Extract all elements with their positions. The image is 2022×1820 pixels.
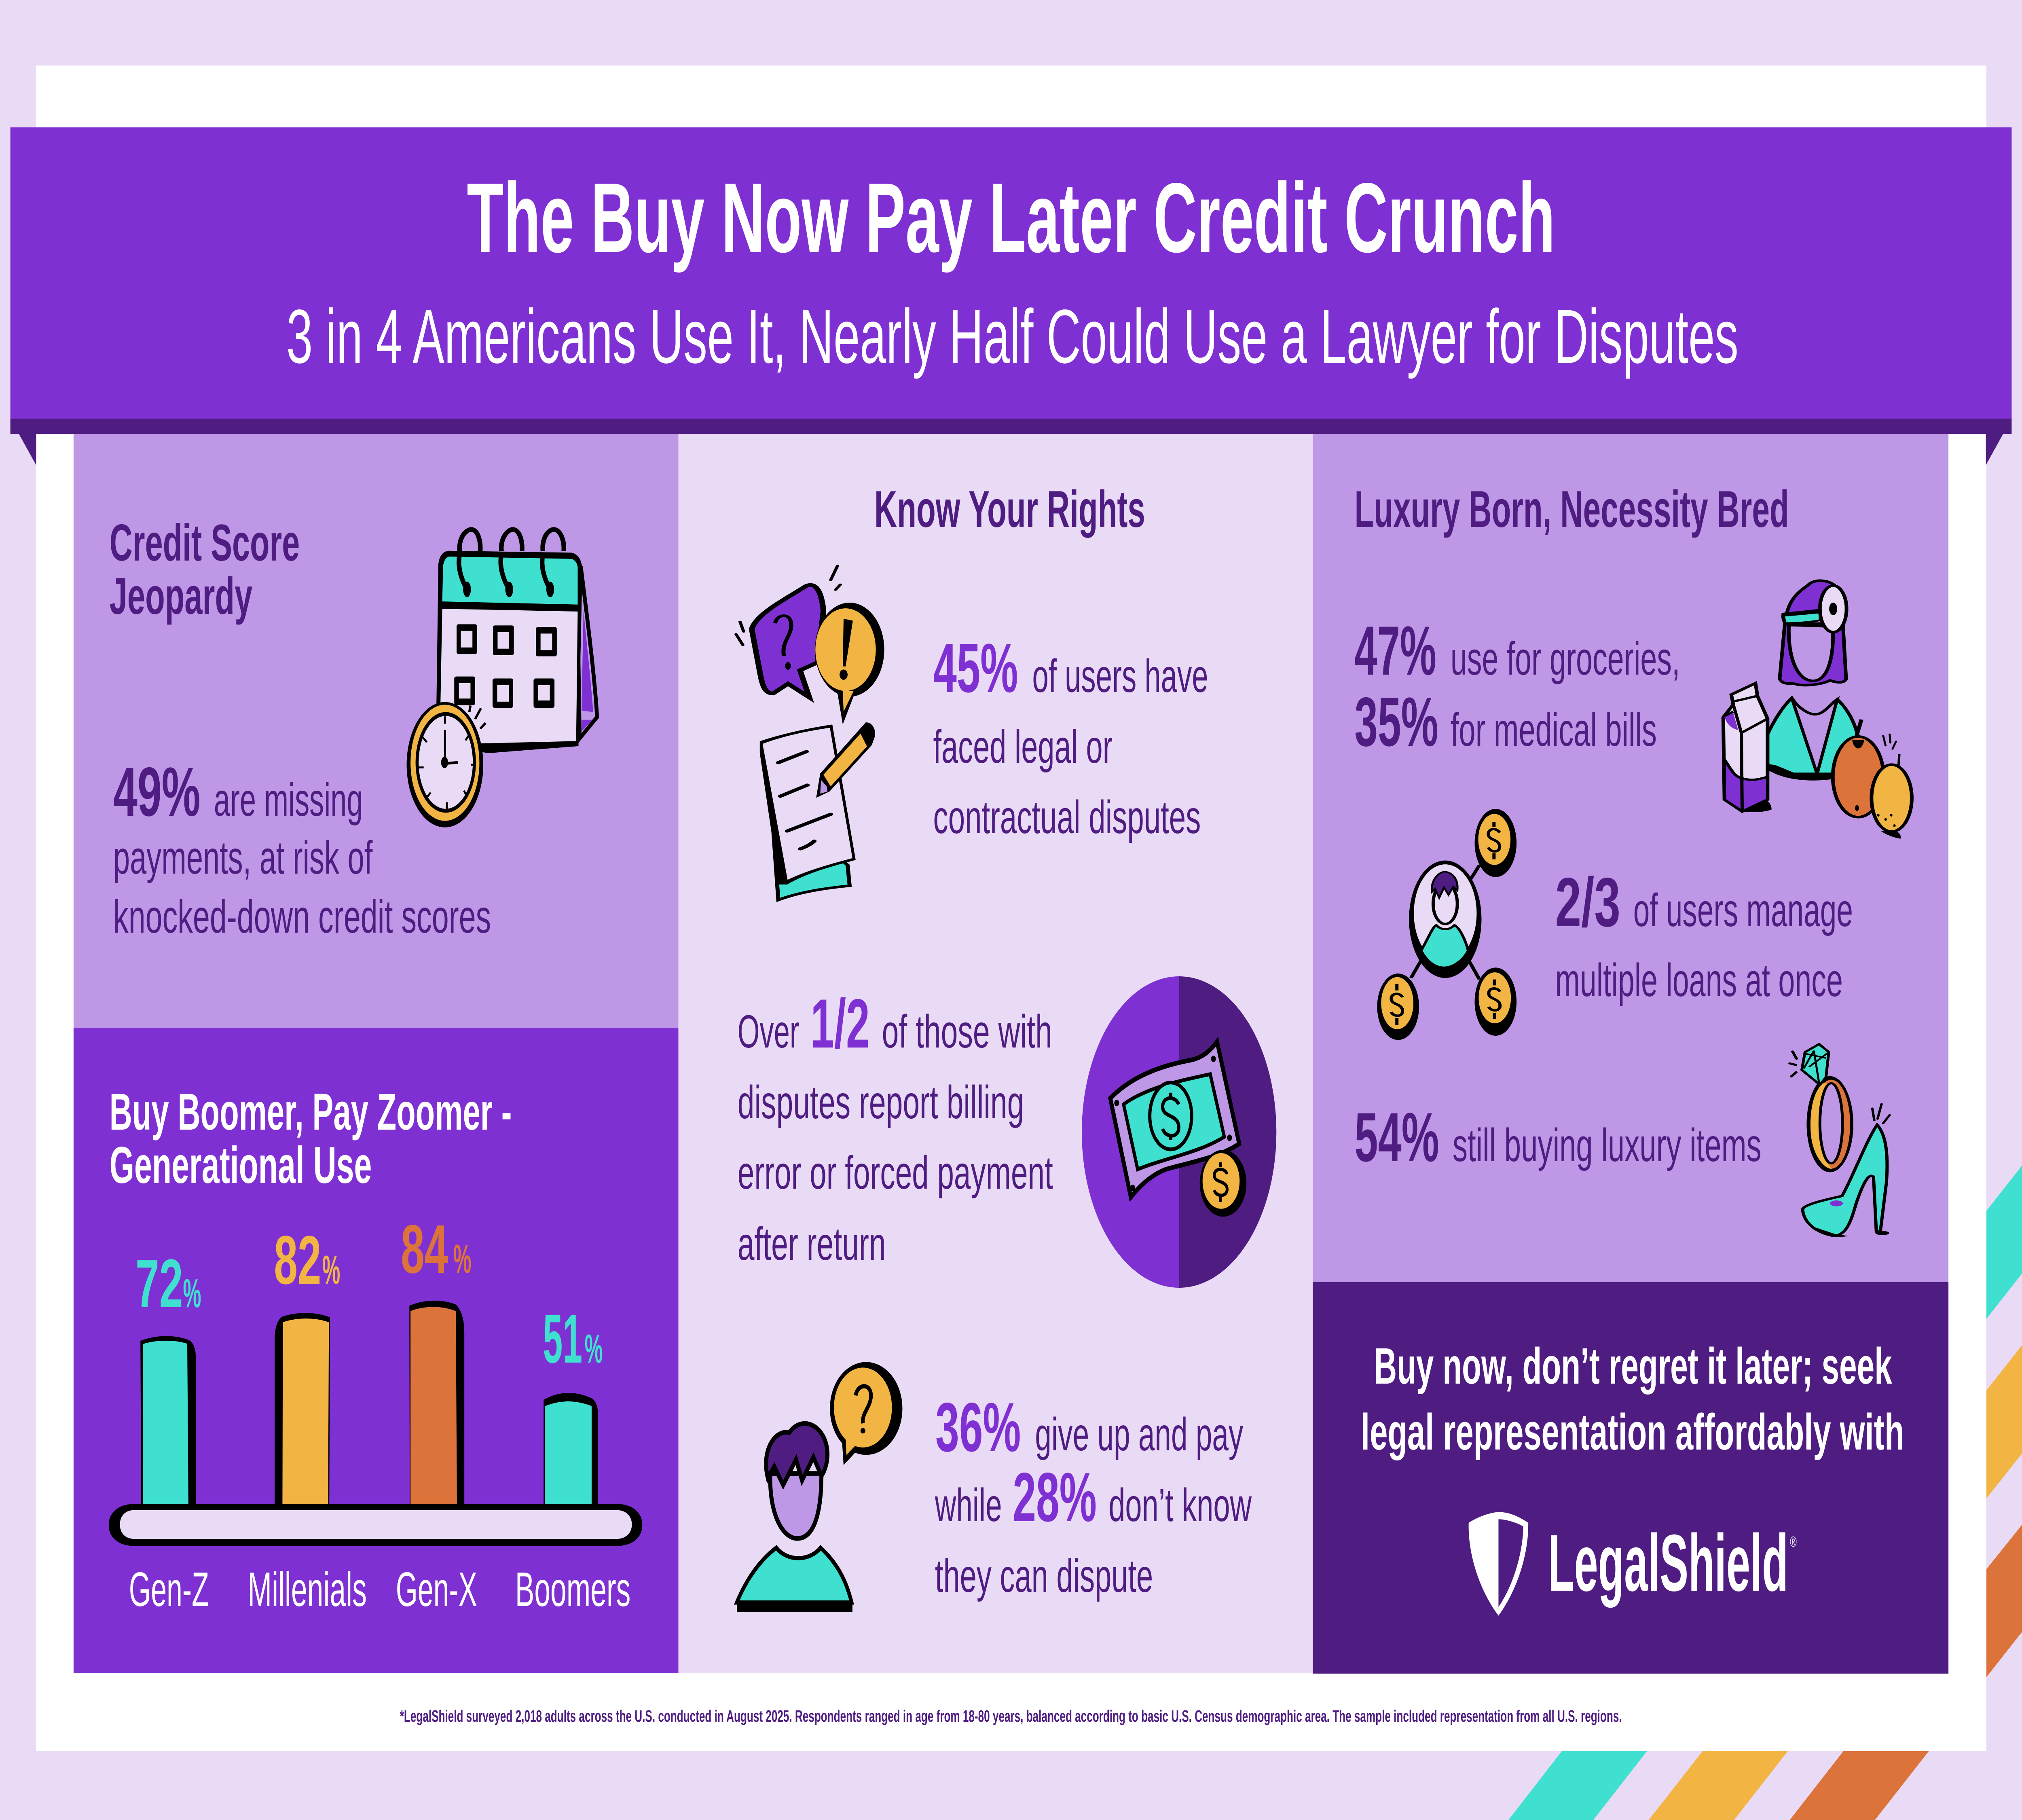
heading: buy boomer pay zoomer: Generational Use	[110, 1136, 372, 1194]
stat: 49 percent missing payments: are missing	[214, 774, 363, 826]
panel: call to action	[1313, 1282, 1948, 1674]
stat: over half billing error: 1/2	[810, 985, 870, 1062]
stat: two thirds multiple loans: multiple loans at once	[1555, 954, 1843, 1006]
value labels: 82	[274, 1222, 321, 1299]
heading: credit score jeopardy: Jeopardy	[110, 567, 252, 625]
heading: credit score jeopardy	[110, 514, 300, 625]
panel: credit score jeopardy	[74, 434, 679, 1028]
heading: buy boomer pay zoomer: Buy Boomer, Pay Zoomer -	[110, 1083, 512, 1141]
value labels: %	[453, 1236, 472, 1282]
icon: speech bubbles and document	[736, 566, 884, 900]
value labels: %	[322, 1247, 340, 1293]
value labels: 84	[401, 1211, 448, 1288]
category labels	[129, 1562, 630, 1617]
stat: over half billing error: Over	[738, 1006, 799, 1058]
panel: generational use	[74, 1028, 679, 1673]
icon: money on split circle	[1082, 976, 1276, 1288]
panel: know your rights	[679, 434, 1313, 1673]
stat: 36 and 28 percent: don’t know	[1108, 1479, 1252, 1531]
stat: over half billing error	[738, 985, 1053, 1270]
category labels: Millenials	[247, 1562, 367, 1617]
value labels: 72	[135, 1246, 183, 1322]
call to action text: Buy now, don’t regret it later; seek	[1374, 1338, 1892, 1395]
category labels: Boomers	[515, 1562, 630, 1617]
stat: over half billing error: of those with	[882, 1006, 1052, 1058]
call to action text	[1361, 1338, 1904, 1461]
stat: 54 percent luxury	[1354, 1098, 1762, 1176]
logo: LegalShield: LegalShield	[1548, 1518, 1788, 1608]
stat: 36 and 28 percent: while	[935, 1479, 1002, 1531]
stat: two thirds multiple loans	[1555, 863, 1853, 1006]
bars	[109, 1301, 642, 1546]
heading: credit score jeopardy: Credit Score	[110, 514, 300, 572]
stat: two thirds multiple loans: 2/3	[1555, 863, 1620, 941]
stat: groceries and medical bills: 35%	[1354, 683, 1438, 761]
category labels: Gen-Z	[129, 1562, 209, 1617]
title: The Buy Now Pay Later Credit Crunch	[467, 163, 1555, 273]
stat: 36 and 28 percent: 36%	[935, 1388, 1021, 1466]
stat: groceries and medical bills	[1354, 612, 1680, 761]
stat: groceries and medical bills: for medical bills	[1451, 704, 1657, 756]
bar chart	[109, 1211, 642, 1617]
icon: confused person	[737, 1362, 902, 1612]
value labels: %	[183, 1271, 201, 1316]
stat: 36 and 28 percent: 28%	[1013, 1458, 1097, 1536]
icon: calendar and clock	[407, 529, 597, 827]
stat: groceries and medical bills: 47%	[1354, 612, 1436, 690]
stat: over half billing error: after return	[738, 1218, 886, 1270]
stat: 54 percent luxury: still buying luxury items	[1453, 1120, 1762, 1171]
category labels: Gen-X	[396, 1562, 477, 1617]
stat: 45 percent legal disputes: of users have	[1032, 650, 1208, 702]
stat: 45 percent legal disputes: contractual disputes	[933, 791, 1201, 843]
title banner	[11, 127, 2011, 465]
stat: 49 percent missing payments: knocked-down credit scores	[113, 891, 491, 943]
icon: doctor and groceries	[1723, 581, 1912, 839]
stat: 49 percent missing payments: payments, at risk of	[113, 832, 373, 884]
stat: 45 percent legal disputes: 45%	[933, 629, 1018, 707]
stat: 54 percent luxury: 54%	[1354, 1098, 1439, 1176]
icon: loans network	[1377, 809, 1516, 1040]
stat: over half billing error: disputes report billing	[738, 1077, 1024, 1128]
stat: 36 and 28 percent: give up and pay	[1035, 1409, 1243, 1460]
heading: know your rights: Know Your Rights	[874, 480, 1145, 538]
call to action text: legal representation affordably with	[1361, 1404, 1904, 1461]
panel: luxury born necessity bred	[1313, 434, 1948, 1282]
stat: two thirds multiple loans: of users manage	[1633, 885, 1853, 936]
heading: luxury born necessity bred: Luxury Born, Necessity Bred	[1354, 480, 1789, 538]
subtitle: 3 in 4 Americans Use It, Nearly Half Could Use a Lawyer for Disputes	[286, 294, 1739, 379]
stat: 49 percent missing payments: 49%	[113, 753, 201, 831]
stat: 36 and 28 percent	[935, 1388, 1252, 1602]
logo: LegalShield: ®	[1790, 1534, 1797, 1550]
value labels: 51	[543, 1301, 582, 1378]
heading: buy boomer pay zoomer	[110, 1083, 512, 1194]
logo: LegalShield	[1469, 1512, 1797, 1616]
value labels	[135, 1211, 603, 1378]
stat: groceries and medical bills: use for groceries,	[1451, 633, 1680, 685]
stat: 36 and 28 percent: they can dispute	[935, 1550, 1153, 1602]
value labels: %	[585, 1326, 603, 1371]
stat: 45 percent legal disputes	[933, 629, 1208, 843]
stat: 49 percent missing payments	[113, 753, 491, 943]
footnote: *LegalShield surveyed 2,018 adults across the U.S. conducted in August 2025. Respondents ranged in age from 18-80 years, balanced according to basic U.S. Census demographic area. The sample included representation from all U.S. regions.	[400, 1707, 1622, 1726]
stat: over half billing error: error or forced payment	[738, 1147, 1053, 1199]
icon: ring and high heel	[1790, 1044, 1890, 1237]
stat: 45 percent legal disputes: faced legal or	[933, 721, 1113, 773]
